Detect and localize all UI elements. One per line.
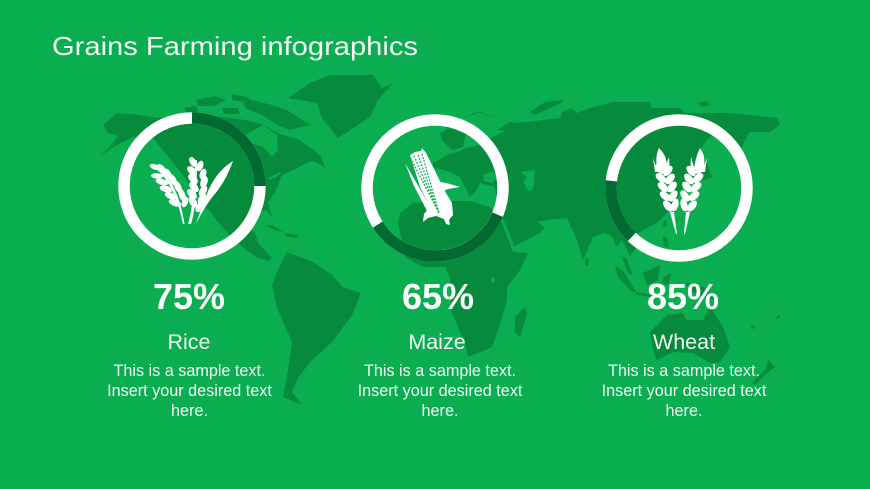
panel: rice	[107, 118, 272, 420]
text block: rice	[107, 362, 272, 420]
ring: wheat 85%	[611, 120, 747, 256]
text block: maize: here.	[422, 402, 458, 420]
text block: maize: Insert your desired text	[358, 382, 523, 400]
icon: rice	[149, 156, 233, 224]
text block: rice: here.	[171, 402, 208, 420]
percentage: 85%: 85%	[647, 276, 719, 317]
panel: wheat	[602, 120, 767, 420]
percentage: 75%: 75%	[153, 276, 225, 317]
panel: maize	[358, 120, 523, 420]
text block: wheat: here.	[666, 402, 702, 420]
label: Wheat: Wheat	[653, 330, 715, 354]
icon: maize	[405, 148, 460, 225]
text block: rice: Insert your desired text	[107, 382, 272, 400]
ring: maize 65%	[367, 120, 503, 256]
text block: wheat: Insert your desired text	[602, 382, 767, 400]
world map	[100, 75, 781, 405]
percentage: 65%: 65%	[402, 276, 474, 317]
icon: wheat	[653, 148, 707, 234]
label: Rice: Rice	[167, 330, 211, 354]
label: Maize: Maize	[408, 330, 466, 354]
text block: wheat: This is a sample text.	[608, 362, 760, 380]
ring: rice 75%	[124, 118, 260, 254]
title: Grains Farming infographics	[52, 31, 418, 61]
text block: wheat	[602, 362, 767, 420]
text block: maize	[358, 362, 523, 420]
text block: rice: This is a sample text.	[113, 362, 266, 380]
text block: maize: This is a sample text.	[364, 362, 516, 380]
